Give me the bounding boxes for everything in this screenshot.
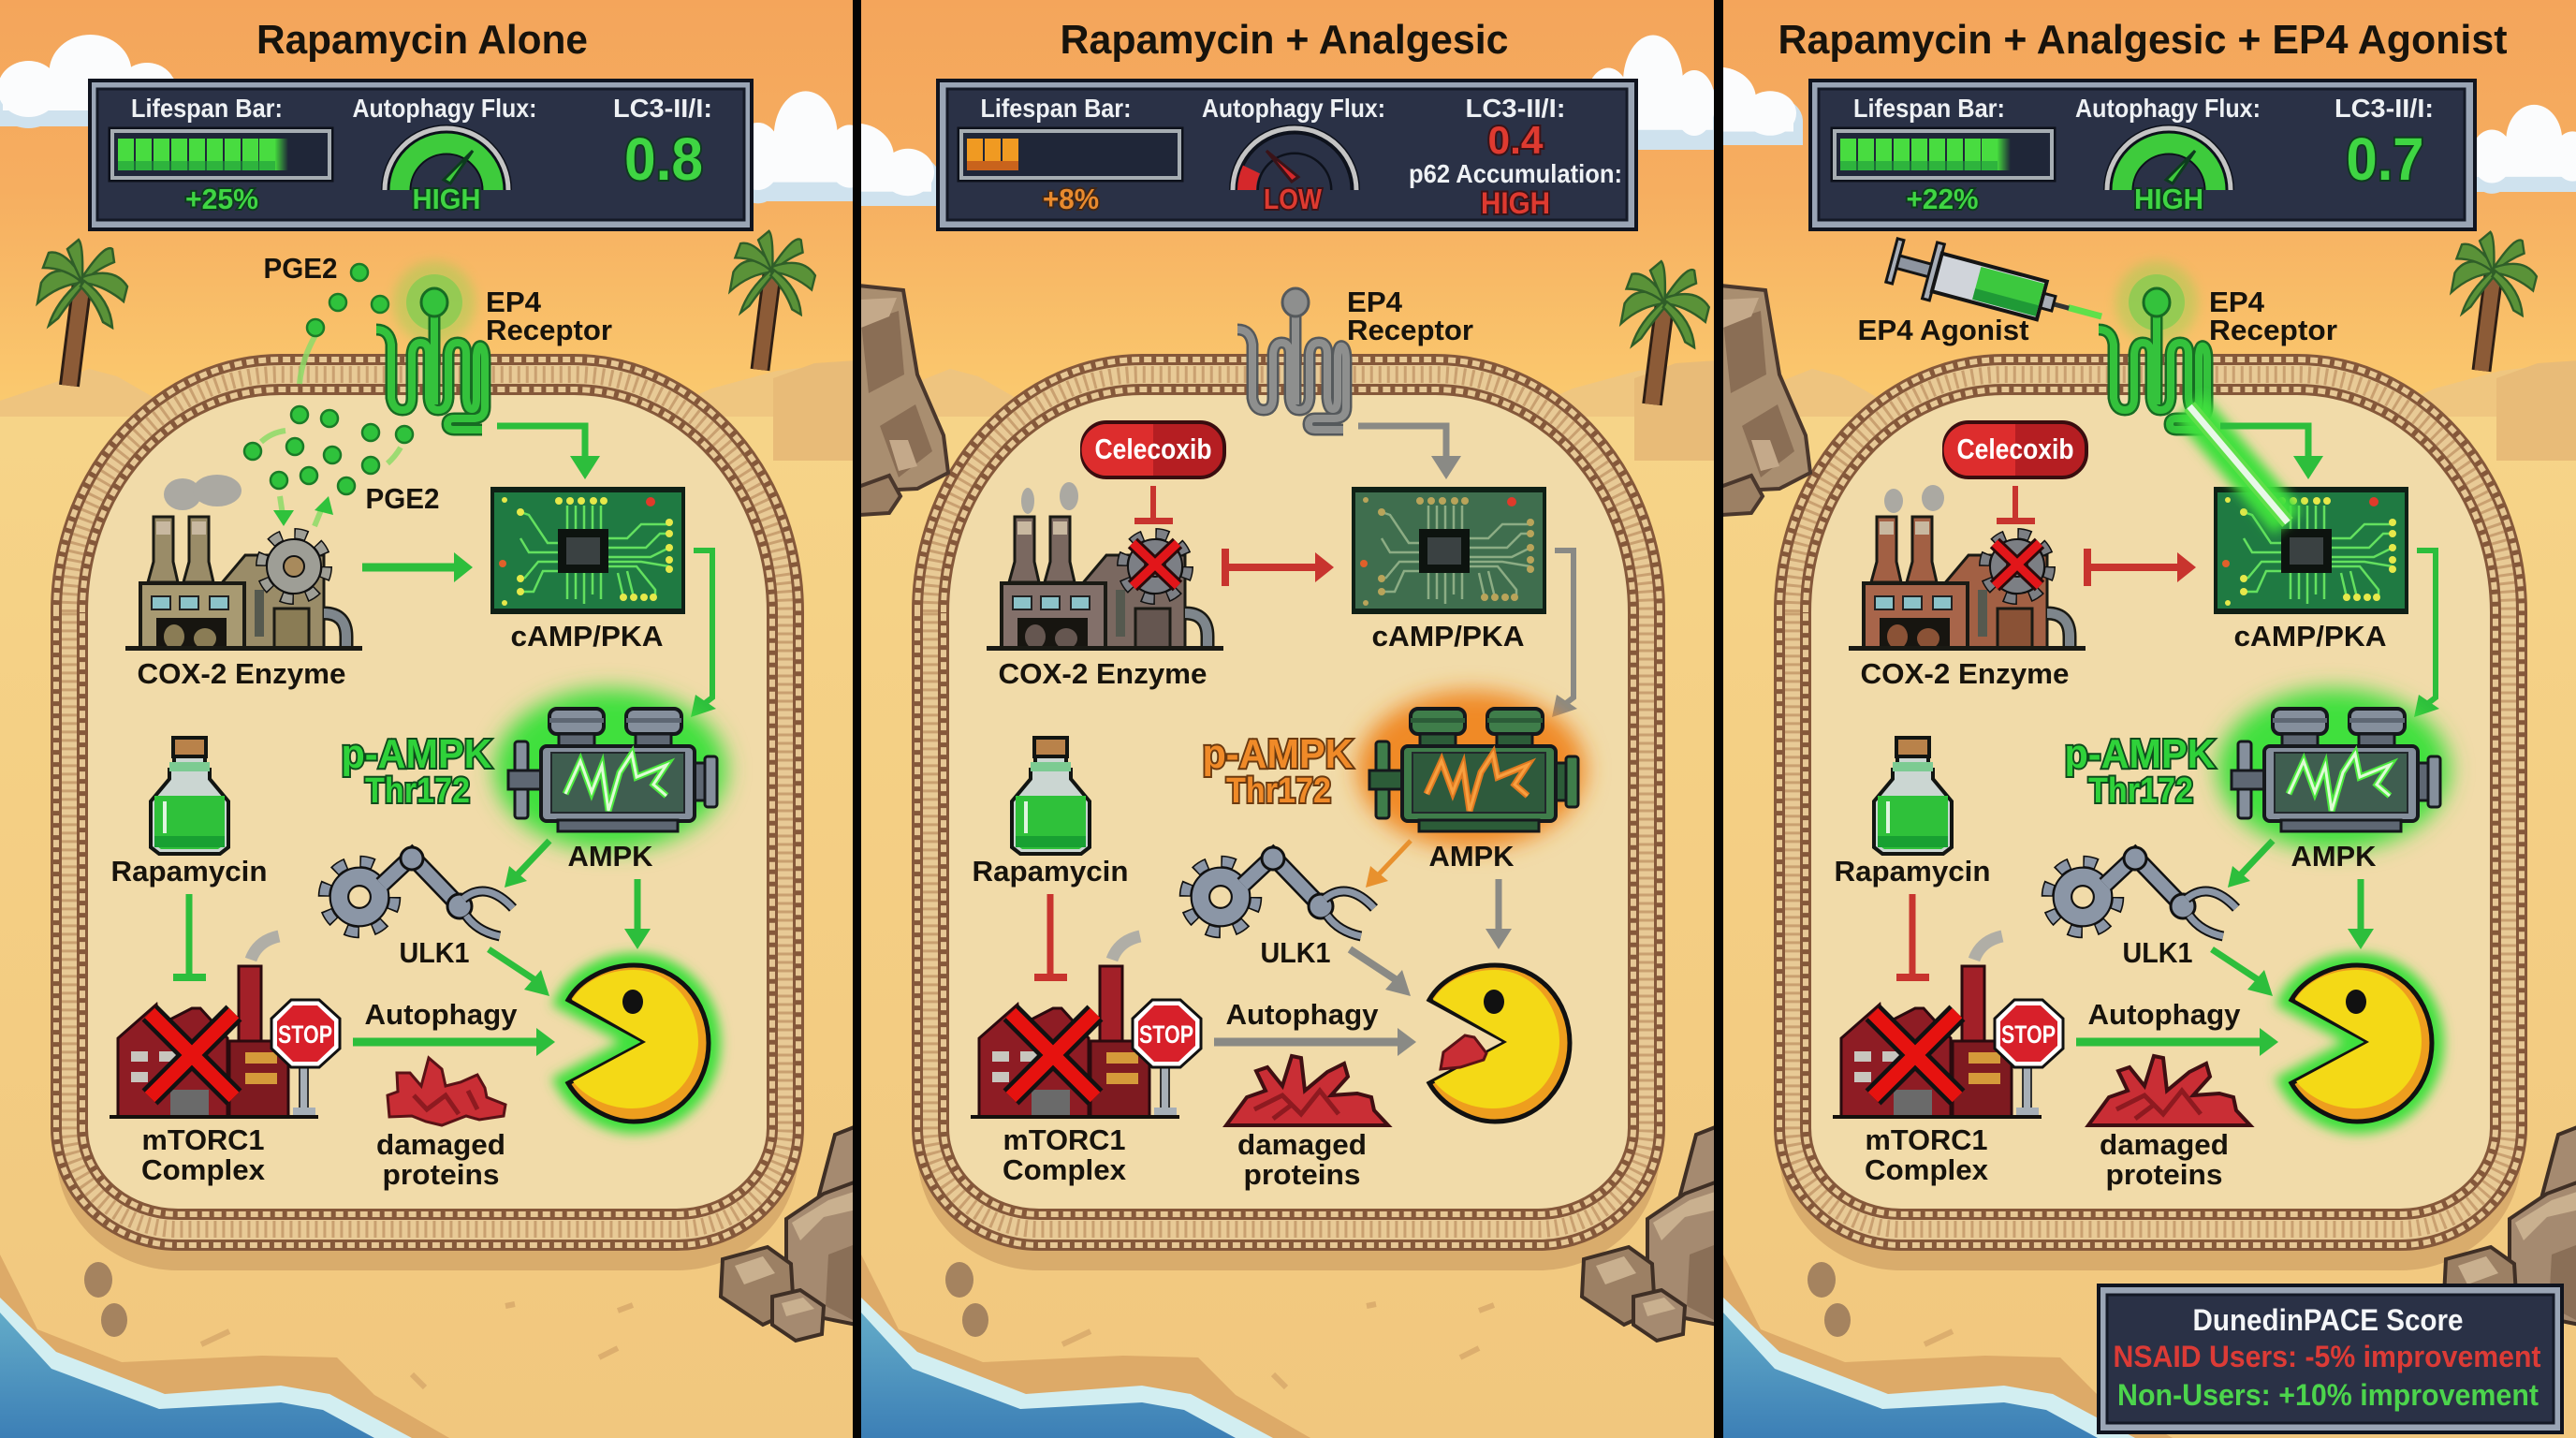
PGE2 molecules and diffusion arrows <box>244 264 413 526</box>
icon: COX-2 factory inhibited <box>1849 517 2086 651</box>
palm tree <box>1621 261 1709 404</box>
icon: rapamycin bottle <box>151 738 228 854</box>
mTORC1 label <box>141 1123 266 1186</box>
damaged proteins label: proteins <box>2106 1158 2222 1191</box>
icon: mTORC1 factory blocked <box>971 966 1201 1119</box>
mTORC1 label: Complex <box>1865 1153 1989 1186</box>
EP4 Agonist label: EP4 Agonist <box>1857 314 2029 346</box>
icon: damaged proteins <box>388 1058 505 1125</box>
EP4 receptor inactive <box>1237 288 1346 430</box>
EP4 receptor label: Receptor <box>2209 314 2337 346</box>
panel: Rapamycin + Analgesic <box>770 0 1722 1438</box>
ULK1 label: ULK1 <box>1260 936 1331 969</box>
Thr172 label: Thr172 <box>365 771 470 811</box>
agonist signal beam <box>2189 406 2288 522</box>
COX-2 label: COX-2 Enzyme <box>1861 657 2069 690</box>
engine glow <box>494 689 726 850</box>
AMPK label: AMPK <box>567 840 653 873</box>
icon: rapamycin bottle <box>1012 738 1090 854</box>
clouds <box>0 35 877 203</box>
engine glow <box>2217 689 2450 850</box>
EP4 receptor label: Receptor <box>1347 314 1473 346</box>
title: Rapamycin + Analgesic + EP4 Agonist <box>1778 17 2508 63</box>
damaged proteins label: damaged <box>1237 1128 1367 1161</box>
COX-2 label: COX-2 Enzyme <box>998 657 1208 690</box>
arrow: ULK1 to autophagy <box>1350 949 1411 996</box>
damaged proteins label <box>376 1128 505 1191</box>
LC3 value: 0.7 <box>2346 125 2424 193</box>
lifespan bar <box>961 131 1179 178</box>
damaged proteins label: proteins <box>1243 1158 1361 1191</box>
COX-2 label: COX-2 Enzyme <box>137 657 346 690</box>
mTORC1 label: mTORC1 <box>142 1123 264 1156</box>
EP4 receptor label: EP4 <box>1347 286 1403 318</box>
gauge reading: HIGH <box>412 183 481 215</box>
icon: pacman stalled with protein <box>1429 965 1570 1122</box>
clouds <box>1632 67 2576 194</box>
Thr172 label: Thr172 <box>2088 771 2193 811</box>
autophagy label: Autophagy Flux: <box>1202 94 1385 123</box>
arrow: AMPK to ULK1 <box>505 841 549 888</box>
arrow: cAMP/PKA to AMPK <box>2414 550 2439 717</box>
icon: rapamycin bottle <box>1874 738 1952 854</box>
arrow: AMPK to ULK1 weak <box>1366 841 1411 888</box>
smoke <box>164 475 242 510</box>
pill: Celecoxib: Celecoxib <box>1956 433 2074 465</box>
LC3 value: 0.4 <box>1488 118 1544 162</box>
engine glow <box>1357 691 1586 848</box>
mTORC1 label: mTORC1 <box>1003 1123 1125 1156</box>
icon: damaged proteins pile <box>1226 1056 1388 1125</box>
ULK1 label: ULK1 <box>399 936 470 969</box>
arrow: AMPK to autophagy <box>1486 879 1512 949</box>
gauge <box>2107 128 2231 190</box>
inhibition: rapamycin to mTORC1 <box>173 894 206 981</box>
Thr172 label: Thr172 <box>1226 771 1331 811</box>
p62 value: HIGH <box>1481 186 1550 220</box>
pill: Celecoxib <box>1082 422 1224 477</box>
icon: COX-2 factory <box>125 517 362 651</box>
EP4 receptor label: EP4 <box>2209 286 2265 318</box>
lifespan value: +22% <box>1906 183 1979 215</box>
gauge reading: LOW <box>1264 183 1323 215</box>
p62 label: p62 Accumulation: <box>1409 159 1622 188</box>
icon: mTORC1 factory blocked <box>1833 966 2063 1119</box>
smoke <box>1021 482 1078 514</box>
smoke <box>251 936 279 960</box>
non-users result: Non-Users: +10% improvement <box>2117 1378 2539 1412</box>
inhibition arrow: COX-2 to cAMP/PKA <box>2087 549 2196 586</box>
EP4 receptor active <box>376 261 485 430</box>
mTORC1 label <box>1003 1123 1127 1186</box>
smoke <box>1112 936 1140 960</box>
icon: COX-2 factory inhibited <box>987 517 1223 651</box>
gauge <box>1233 128 1356 190</box>
panel: Rapamycin + Analgesic + EP4 Agonist <box>1632 0 2576 1438</box>
inhibition arrow: COX-2 to cAMP/PKA <box>1225 549 1334 586</box>
cAMP/PKA label: cAMP/PKA <box>511 620 663 653</box>
Rapamycin label: Rapamycin <box>110 855 268 888</box>
palm trees <box>37 231 815 386</box>
mTORC1 label: Complex <box>141 1153 266 1186</box>
cAMP/PKA label: cAMP/PKA <box>1372 620 1524 653</box>
PGE2 label lower: PGE2 <box>365 482 440 515</box>
arrow: receptor to cAMP/PKA <box>497 426 600 479</box>
arrow: cAMP/PKA to AMPK <box>1552 550 1577 717</box>
arrow: AMPK to autophagy <box>2348 879 2374 949</box>
icon: ULK1 robotic arm <box>324 847 513 936</box>
rocks <box>1720 286 2576 1341</box>
AMPK label: AMPK <box>1428 840 1515 873</box>
arrow: autophagy <box>353 1028 555 1056</box>
mTORC1 label <box>1865 1123 1989 1186</box>
Autophagy label: Autophagy <box>2087 998 2241 1031</box>
lifespan bar <box>112 131 329 178</box>
Autophagy label: Autophagy <box>365 998 518 1031</box>
damaged proteins label: damaged <box>2100 1128 2229 1161</box>
p-AMPK label: p-AMPK <box>2065 731 2216 777</box>
beach scene and cell membrane <box>861 0 1722 1438</box>
icon: pacman autophagosome <box>2291 965 2432 1122</box>
stop sign text: STOP <box>278 1020 332 1049</box>
pacman glow <box>2291 965 2432 1122</box>
damaged proteins label: damaged <box>376 1128 505 1161</box>
status panel <box>88 79 754 231</box>
icon: circuit board <box>2214 487 2408 614</box>
damaged proteins label <box>1237 1128 1367 1191</box>
inhibition: celecoxib to COX-2 <box>1997 486 2035 524</box>
pill: Celecoxib: Celecoxib <box>1095 433 1211 465</box>
arrow: ULK1 to autophagy <box>2212 949 2273 996</box>
inhibition: rapamycin to mTORC1 <box>1896 894 1929 981</box>
icon: mTORC1 factory blocked <box>110 966 340 1119</box>
beach scene and cell membrane <box>0 0 861 1438</box>
LC3 label: LC3-II/I: <box>1466 94 1565 123</box>
icon: EP4 agonist syringe <box>1884 232 2109 345</box>
smoke <box>1974 936 2002 960</box>
damaged proteins label: proteins <box>382 1158 500 1191</box>
EP4 receptor label: Receptor <box>486 314 612 346</box>
rocks <box>858 286 1718 1341</box>
NSAID users result: NSAID Users: -5% improvement <box>2114 1340 2541 1373</box>
icon: circuit board <box>490 487 685 614</box>
inhibition: rapamycin to mTORC1 <box>1034 894 1067 981</box>
icon: AMPK engine <box>2232 709 2440 831</box>
icon: pacman autophagosome <box>568 965 709 1122</box>
LC3 label: LC3-II/I: <box>613 94 712 123</box>
icon: damaged proteins pile <box>2088 1056 2250 1125</box>
lifespan bar <box>1835 131 2052 178</box>
lifespan value: +8% <box>1043 183 1099 215</box>
arrow: autophagy impaired <box>1214 1028 1416 1056</box>
PGE2 label upper: PGE2 <box>264 252 337 285</box>
autophagy label: Autophagy Flux: <box>352 94 537 123</box>
title: Rapamycin + Analgesic <box>1060 17 1509 63</box>
arrow: ULK1 to autophagy <box>489 949 549 996</box>
Rapamycin label: Rapamycin <box>972 855 1129 888</box>
icon: circuit board dimmed <box>1352 487 1546 614</box>
arrow: receptor to cAMP/PKA <box>2220 426 2323 479</box>
panel: Rapamycin Alone <box>0 0 877 1438</box>
cAMP/PKA label: cAMP/PKA <box>2233 620 2387 653</box>
arrow: COX-2 to cAMP/PKA <box>362 552 473 582</box>
title: Rapamycin Alone <box>256 17 588 63</box>
Rapamycin label: Rapamycin <box>1835 855 1990 888</box>
panel: DunedinPACE score <box>2097 1284 2564 1434</box>
arrow: AMPK to ULK1 <box>2228 841 2273 888</box>
arrow: receptor to cAMP/PKA (inactive) <box>1358 426 1461 479</box>
LC3 value: 0.8 <box>624 125 703 193</box>
lifespan label: Lifespan Bar: <box>1853 94 2005 123</box>
EP4 receptor active <box>2099 261 2207 430</box>
beach scene and cell membrane <box>1723 0 2576 1438</box>
EP4 receptor label <box>2209 286 2337 346</box>
ULK1 label: ULK1 <box>2123 936 2192 969</box>
p-AMPK label: p-AMPK <box>341 731 492 777</box>
icon: ULK1 robotic arm <box>2047 847 2236 936</box>
gauge <box>385 128 508 190</box>
red X on COX-2 gear <box>1133 543 1178 586</box>
AMPK label: AMPK <box>2291 840 2377 873</box>
palm tree <box>2452 232 2537 371</box>
mTORC1 label: mTORC1 <box>1865 1123 1988 1156</box>
damaged proteins label <box>2100 1128 2229 1191</box>
icon: AMPK engine <box>508 709 717 831</box>
clouds <box>770 36 1720 208</box>
EP4 receptor label: EP4 <box>486 286 542 318</box>
autophagy label: Autophagy Flux: <box>2075 94 2261 123</box>
EP4 receptor label <box>488 292 612 346</box>
arrow: AMPK to autophagy <box>624 879 651 949</box>
EP4 receptor label <box>1347 286 1473 346</box>
score title: DunedinPACE Score <box>2192 1303 2464 1337</box>
status panel <box>1808 79 2477 231</box>
lifespan value: +25% <box>185 183 258 215</box>
pill: Celecoxib <box>1944 422 2086 477</box>
lifespan label: Lifespan Bar: <box>131 94 283 123</box>
Autophagy label: Autophagy <box>1226 998 1379 1031</box>
arrow: cAMP/PKA to AMPK <box>691 550 716 717</box>
lifespan label: Lifespan Bar: <box>981 94 1131 123</box>
LC3 label: LC3-II/I: <box>2334 94 2434 123</box>
stop sign text: STOP <box>1139 1020 1193 1049</box>
rocks <box>721 1126 856 1341</box>
icon: ULK1 robotic arm <box>1185 847 1374 936</box>
p-AMPK label: p-AMPK <box>1202 731 1354 777</box>
pacman glow <box>568 965 709 1122</box>
icon: AMPK engine weak <box>1369 709 1578 831</box>
mTORC1 label: Complex <box>1003 1153 1127 1186</box>
inhibition: celecoxib to COX-2 <box>1134 486 1173 524</box>
stop sign text: STOP <box>2001 1020 2056 1049</box>
red X on COX-2 gear <box>1995 543 2040 586</box>
smoke <box>1884 485 1944 513</box>
gauge reading: HIGH <box>2134 183 2203 215</box>
status panel <box>936 79 1638 231</box>
arrow: autophagy <box>2076 1028 2278 1056</box>
